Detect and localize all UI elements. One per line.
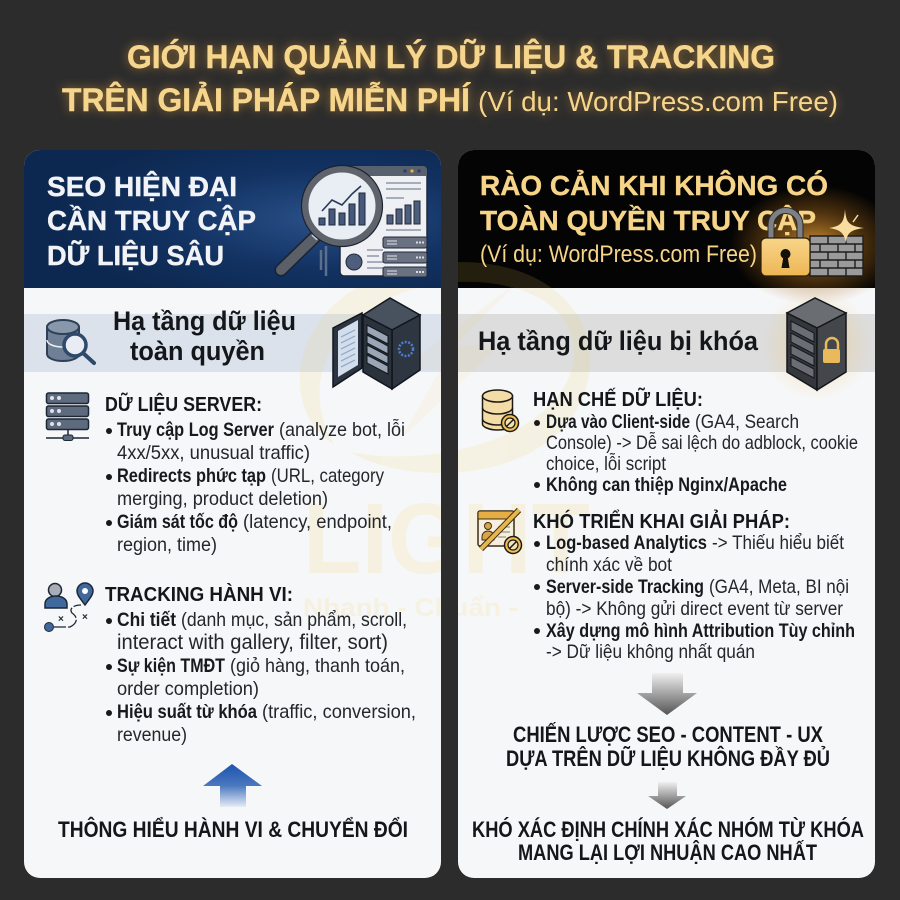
block: khó triển khai giải pháp: Server-side Tracking: [546, 576, 704, 598]
block: khó triển khai giải pháp: (GA4, Meta, BI nội: [709, 576, 849, 598]
left conclusion: THÔNG HIỂU HÀNH VI & CHUYỂN ĐỔI: [58, 817, 408, 842]
left header heading: DỮ LIỆU SÂU: [47, 240, 224, 271]
block: hạn chế dữ liệu: Không can thiệp Nginx/Apache: [546, 474, 787, 496]
block: dữ liệu server: Truy cập Log Server: [117, 419, 274, 441]
block: tracking hành vi: revenue): [117, 724, 187, 746]
block: tracking hành vi: (giỏ hàng, thanh toán,: [230, 655, 405, 677]
right sub-heading: Hạ tầng dữ liệu bị khóa: [478, 326, 759, 356]
lock glow: [734, 188, 875, 302]
icon: restricted database: [482, 390, 518, 432]
block: hạn chế dữ liệu: Dựa vào Client-side: [546, 411, 690, 433]
block: tracking hành vi: (traffic, conversion,: [262, 701, 416, 723]
left header heading: CẦN TRUY CẬP: [47, 205, 256, 236]
block: dữ liệu server: (analyze bot, lỗi: [279, 418, 405, 441]
block: khó triển khai giải pháp: Log-based Analytics: [546, 532, 707, 554]
block: dữ liệu server: Redirects phức tạp: [117, 465, 266, 487]
block: khó triển khai giải pháp: bộ) -> Không gửi direct event từ server: [546, 598, 843, 620]
left sub-heading: Hạ tầng dữ liệu: [113, 306, 296, 336]
block: tracking hành vi: [44, 583, 416, 746]
block: khó triển khai giải pháp: chính xác về bot: [546, 554, 673, 576]
block: dữ liệu server: [46, 392, 405, 556]
title: [62, 39, 838, 118]
panel: left: [24, 150, 441, 878]
icon: user journey: ×: [58, 614, 64, 625]
block: tracking hành vi: Sự kiện TMĐT: [117, 655, 225, 677]
right conclusion: MANG LẠI LỢI NHUẬN CAO NHẤT: [518, 840, 817, 865]
block: dữ liệu server: merging, product deletion): [117, 488, 328, 510]
icon: blocked analytics window: [478, 510, 522, 554]
arrow: up: [203, 764, 262, 807]
block: hạn chế dữ liệu: HẠN CHẾ DỮ LIỆU:: [533, 387, 703, 411]
block: dữ liệu server: 4xx/5xx, unusual traffic): [117, 442, 310, 464]
block: tracking hành vi: interact with gallery, filter, sort): [117, 631, 388, 654]
icon: open server rack: [333, 298, 420, 389]
block: khó triển khai giải pháp: -> Dữ liệu không nhất quán: [546, 641, 755, 663]
icon: padlock and brick wall: [761, 209, 864, 276]
arrow: down large: [637, 673, 697, 715]
left header heading: SEO HIỆN ĐẠI: [47, 171, 237, 202]
left header background: [24, 150, 441, 288]
block: khó triển khai giải pháp: [478, 509, 855, 663]
right sub-heading band: [458, 314, 875, 372]
icon: user journey: ×: [82, 612, 88, 623]
block: khó triển khai giải pháp: KHÓ TRIỂN KHAI GIẢI PHÁP:: [533, 509, 790, 533]
title: (Ví dụ: WordPress.com Free): [478, 86, 838, 117]
left sub-heading band: [24, 314, 441, 372]
block: khó triển khai giải pháp: -> Thiếu hiểu biết: [712, 532, 845, 554]
title: GIỚI HẠN QUẢN LÝ DỮ LIỆU & TRACKING: [127, 39, 775, 75]
block: dữ liệu server: Giám sát tốc độ: [117, 511, 238, 533]
right strategy text: DỰA TRÊN DỮ LIỆU KHÔNG ĐẦY ĐỦ: [506, 746, 830, 771]
panel: right: [458, 150, 900, 878]
right strategy text: CHIẾN LƯỢC SEO - CONTENT - UX: [513, 722, 823, 747]
block: tracking hành vi: TRACKING HÀNH VI:: [105, 583, 293, 606]
icon: magnifier over analytics dashboard: [281, 166, 427, 277]
right header heading: [480, 169, 828, 268]
block: hạn chế dữ liệu: [482, 387, 858, 496]
icon: user journey: [44, 583, 93, 632]
left sub-heading: [113, 306, 296, 366]
block: tracking hành vi: order completion): [117, 678, 259, 700]
block: dữ liệu server: DỮ LIỆU SERVER:: [105, 392, 262, 416]
block: dữ liệu server: region, time): [117, 534, 217, 556]
right strategy text: [506, 722, 830, 771]
right header heading: RÀO CẢN KHI KHÔNG CÓ: [480, 169, 828, 201]
watermark logo: LIGHT: [303, 483, 590, 595]
arrow: down small: [648, 782, 686, 809]
icon: database search: [47, 320, 94, 363]
right header background: [458, 150, 875, 288]
left sub-heading: toàn quyền: [130, 336, 265, 366]
block: hạn chế dữ liệu: choice, lỗi script: [546, 452, 667, 475]
watermark logo: [300, 262, 590, 622]
block: dữ liệu server: (URL, category: [271, 465, 384, 487]
watermark logo: Nhanh - Chuẩn -: [303, 594, 518, 622]
icon: server stack: [46, 393, 89, 440]
block: hạn chế dữ liệu: (GA4, Search: [695, 411, 799, 433]
right conclusion: [472, 817, 864, 865]
title: TRÊN GIẢI PHÁP MIỄN PHÍ: [62, 82, 471, 118]
right header heading: TOÀN QUYỀN TRUY CẬP: [480, 205, 816, 236]
block: tracking hành vi: (danh mục, sản phẩm, scroll,: [181, 609, 407, 631]
right header heading: (Ví dụ: WordPress.com Free): [480, 241, 757, 268]
icon: locked server: [762, 290, 872, 400]
block: tracking hành vi: Chi tiết: [117, 609, 176, 631]
block: dữ liệu server: (latency, endpoint,: [243, 511, 392, 533]
block: tracking hành vi: Hiệu suất từ khóa: [117, 701, 257, 723]
left header heading: [47, 171, 256, 271]
